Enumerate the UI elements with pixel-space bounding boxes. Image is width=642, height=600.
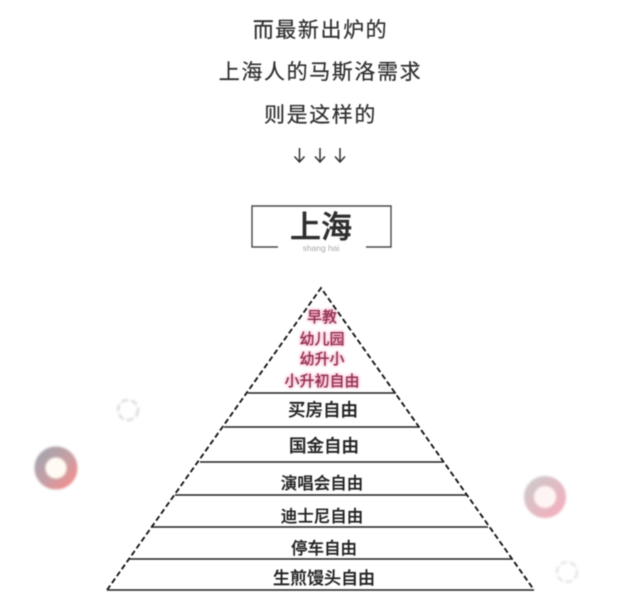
pyramid: [107, 288, 534, 590]
pyramid tier dividers: [107, 393, 534, 590]
pyramid top tier: pink glow: 小升初自由: [284, 373, 360, 390]
pyramid outline: [107, 288, 534, 590]
title box: Shanghai: 上海: [290, 210, 352, 245]
pyramid tier labels: 演唱会自由: [281, 474, 363, 493]
title box: Shanghai: shang hai: [303, 243, 340, 253]
pyramid tier labels: 买房自由: [288, 400, 358, 420]
intro heading: 而最新出炉的: [253, 19, 388, 42]
decoration: right dashed ring: [557, 562, 577, 582]
decoration: left dashed ring: [118, 400, 138, 420]
pyramid tier labels: 国金自由: [289, 436, 359, 456]
intro heading: 则是这样的: [264, 104, 377, 127]
icon: three down arrows: [294, 148, 345, 162]
pyramid top tier: pink glow: 幼儿园: [299, 331, 345, 348]
title box: Shanghai: [252, 206, 391, 253]
pyramid top tier: pink glow: 小升初自由: [284, 373, 360, 390]
pyramid tier labels: [273, 400, 375, 588]
intro heading: 上海人的马斯洛需求: [219, 61, 422, 84]
pyramid tier labels: 停车自由: [291, 539, 357, 558]
intro heading: [219, 19, 422, 127]
pyramid top tier: pink glow: 早教: [307, 309, 337, 326]
pyramid top tier: pink glow: 早教: [307, 309, 337, 326]
decoration: left pink ring: [40, 452, 72, 484]
pyramid top tier: pink glow: 幼升小: [299, 351, 345, 368]
decoration: right pink ring: [529, 481, 561, 513]
pyramid tier labels: 迪士尼自由: [281, 507, 363, 526]
pyramid top tier: pink glow: 幼升小: [299, 351, 345, 368]
pyramid top tier: pink glow: [284, 309, 360, 390]
pyramid tier labels: 生煎馒头自由: [273, 568, 375, 588]
pyramid top tier: pink glow: 幼儿园: [299, 331, 345, 348]
